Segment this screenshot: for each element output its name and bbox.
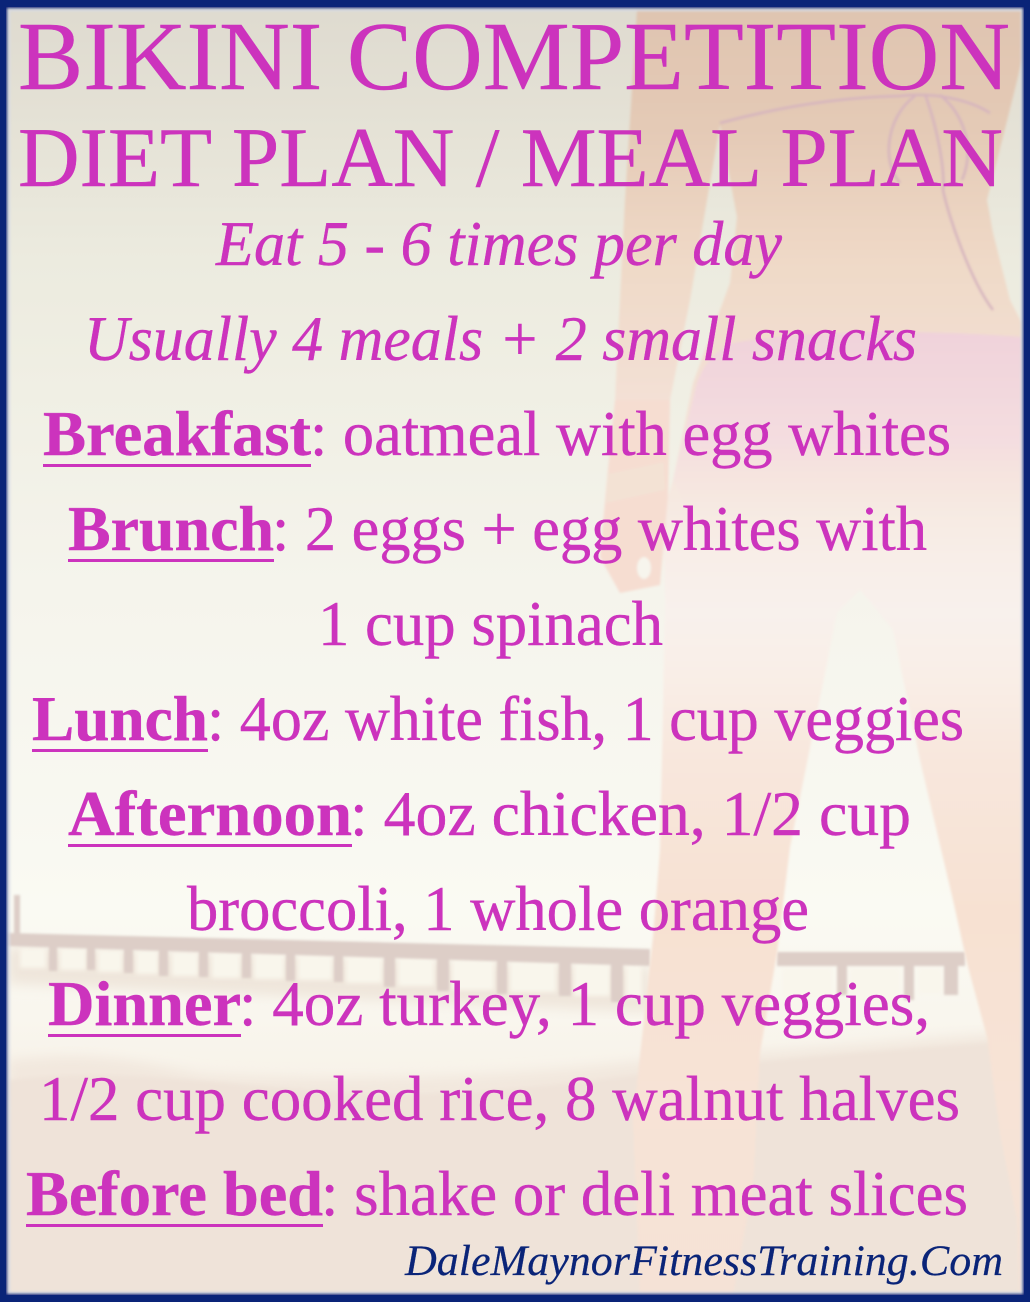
gap between fingers (637, 557, 651, 579)
title line 2: DIET PLAN / MEAL PLAN (18, 111, 1003, 205)
brunch: Brunch (68, 493, 274, 564)
lunch: Lunch (32, 683, 208, 754)
dinner (39, 968, 960, 1134)
dinner: 1/2 cup cooked rice, 8 walnut halves (39, 1063, 960, 1134)
breakfast: Breakfast (43, 398, 312, 469)
title line 1: BIKINI COMPETITION (18, 3, 1010, 111)
wristband (606, 462, 665, 503)
before bed: Before bed (26, 1158, 323, 1229)
afternoon (68, 778, 911, 944)
before bed (26, 1158, 968, 1229)
bikini top strings (720, 94, 993, 310)
afternoon: Afternoon (68, 778, 352, 849)
breakfast (43, 398, 951, 469)
brunch (68, 493, 927, 659)
figure: arm, torso and legs (600, 10, 1022, 1295)
pier gaps (20, 948, 942, 1002)
dinner: : 4oz turkey, 1 cup veggies, (239, 968, 930, 1039)
sea below the pier (8, 946, 650, 1012)
pier (8, 895, 965, 1002)
afternoon: broccoli, 1 whole orange (187, 873, 809, 944)
subtitle: meals and snacks: Usually 4 meals + 2 small snacks (84, 303, 917, 374)
afternoon: : 4oz chicken, 1/2 cup (350, 778, 911, 849)
brunch: : 2 eggs + egg whites with (272, 493, 927, 564)
bikini bottom (673, 332, 1022, 515)
hand (600, 400, 670, 593)
sand (8, 1040, 1022, 1295)
dinner: Dinner (48, 968, 241, 1039)
website credit: DaleMaynorFitnessTraining.Com (404, 1238, 1003, 1285)
brunch: 1 cup spinach (318, 588, 663, 659)
lunch: : 4oz white fish, 1 cup veggies (207, 683, 964, 754)
before bed: : shake or deli meat slices (321, 1158, 968, 1229)
subtitle: meals per day: Eat 5 - 6 times per day (215, 208, 783, 279)
breakfast: : oatmeal with egg whites (310, 398, 951, 469)
surf (8, 1032, 1022, 1100)
